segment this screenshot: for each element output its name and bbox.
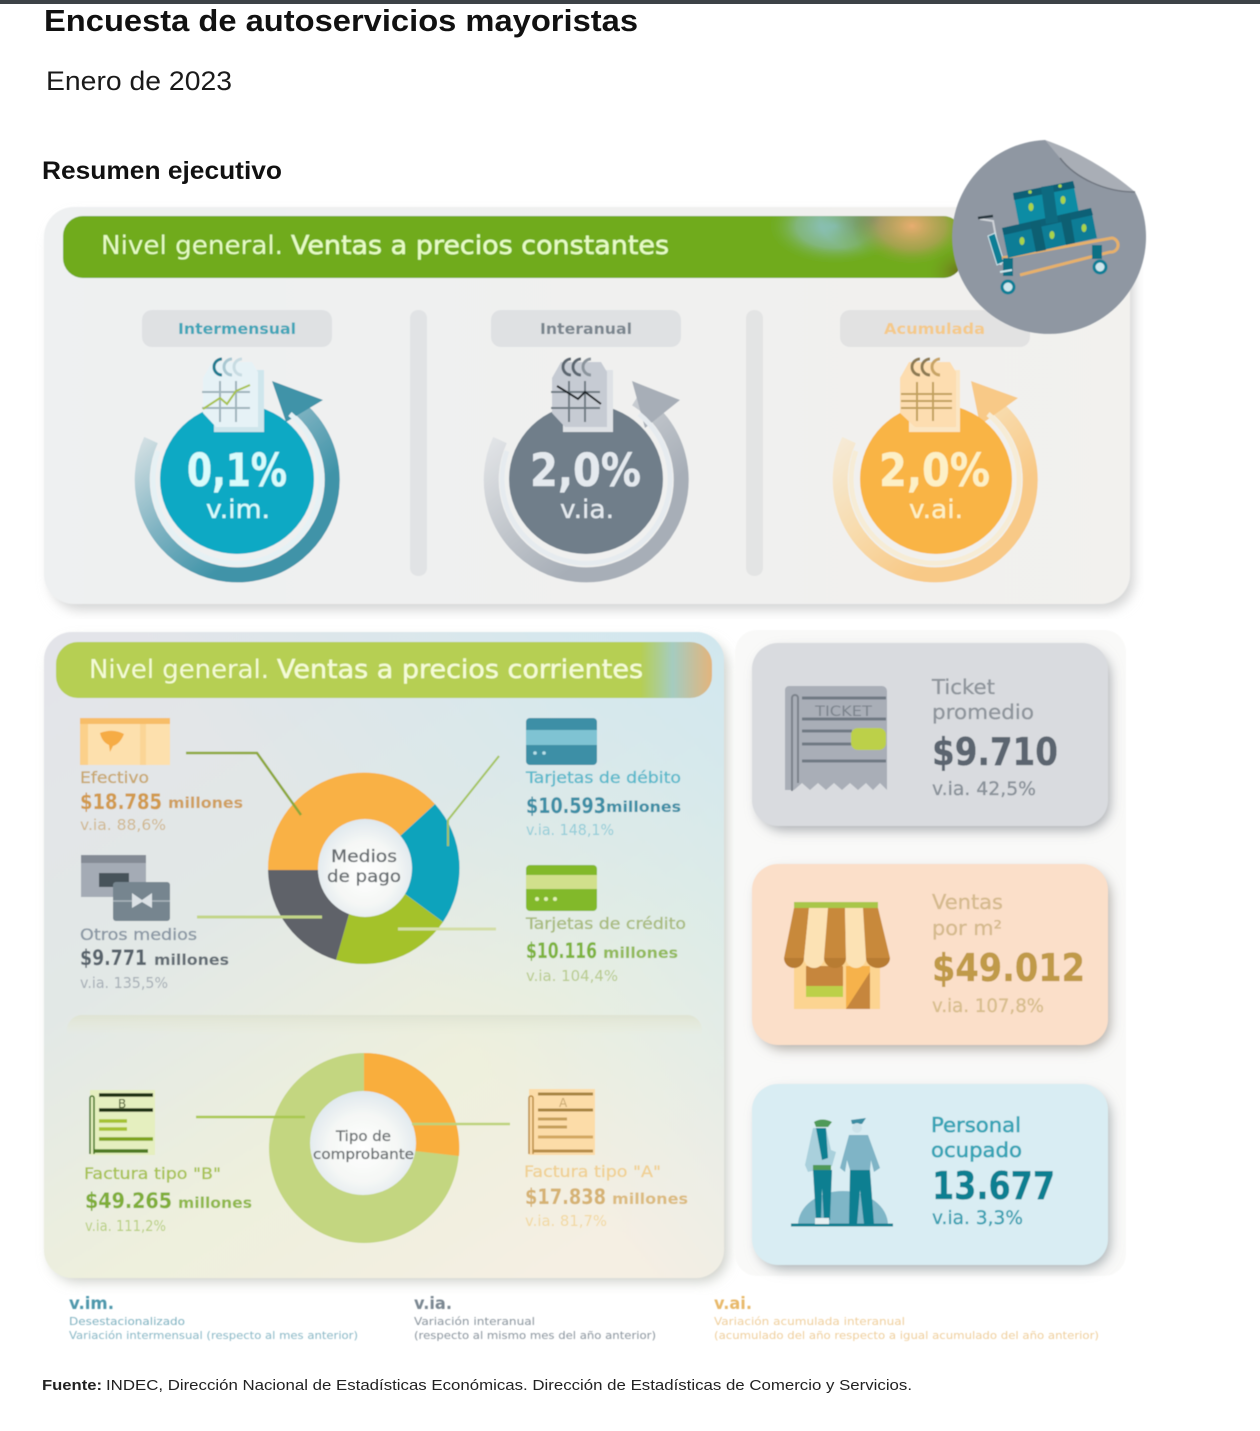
icon: invoice A	[529, 1089, 595, 1155]
source note: Fuente:	[42, 1378, 102, 1394]
metric: factura B: Factura tipo "B"	[84, 1164, 221, 1183]
card text: Ventas	[932, 890, 1003, 914]
disk	[160, 404, 314, 554]
legend: v.ai.: v.ai.	[714, 1294, 752, 1314]
value: 2,0%	[879, 444, 990, 497]
icon: ticket	[785, 686, 887, 791]
card text: promedio	[932, 700, 1034, 724]
metric: debito: Tarjetas de débito	[525, 768, 681, 787]
legend: v.ai.: Variación acumulada interanual	[714, 1315, 905, 1328]
card text: $49.012	[932, 946, 1085, 990]
leader: factura B	[196, 1116, 305, 1118]
icon: cart sticker	[952, 140, 1146, 334]
icon: invoice B	[90, 1090, 155, 1155]
column divider 2	[746, 310, 763, 576]
pill: acumulada: Acumulada	[884, 320, 985, 338]
metric: factura B	[84, 1164, 252, 1235]
panel: constant prices	[44, 184, 1134, 610]
panel: current prices	[44, 632, 728, 1282]
metric: factura A	[524, 1162, 688, 1230]
banner: current prices: Nivel general.	[89, 655, 269, 685]
disk	[509, 404, 663, 554]
metric: debito: millones	[606, 798, 681, 816]
metric: efectivo: v.ia. 88,6%	[80, 816, 166, 834]
legend: v.ai.	[714, 1294, 1099, 1342]
donut label: de pago	[327, 867, 401, 887]
leader: otros	[197, 916, 322, 918]
metric: factura B: $49.265	[85, 1189, 172, 1213]
column divider 1	[410, 310, 427, 576]
card: ventas por m2	[752, 864, 1110, 1049]
source note: INDEC, Dirección Nacional de Estadísticas Económicas. Dirección de Estadísticas de Comercio y Servicios.	[106, 1378, 912, 1394]
metric: factura A: millones	[612, 1190, 688, 1208]
panel: key indicators	[735, 630, 1126, 1276]
metric: credito: v.ia. 104,4%	[526, 967, 618, 985]
card text: v.ia. 42,5%	[932, 778, 1036, 800]
donut: invoice type	[269, 1053, 459, 1243]
metric: credito: Tarjetas de crédito	[525, 914, 686, 933]
pill: interanual	[491, 310, 681, 347]
legend: v.ia.: Variación interanual	[414, 1315, 535, 1328]
card text: 13.677	[932, 1164, 1055, 1208]
metric: otros: Otros medios	[80, 925, 197, 944]
circular arrow	[491, 381, 681, 575]
legend: v.ia.: v.ia.	[414, 1294, 452, 1314]
banner: constant prices	[62, 215, 958, 279]
banner: current prices: Ventas a precios corrientes	[277, 655, 643, 685]
icon: staff	[791, 1118, 893, 1225]
banner: current prices	[56, 642, 712, 698]
metric: efectivo: millones	[168, 794, 243, 812]
icon: invoice A: A	[559, 1096, 568, 1110]
card text	[931, 1113, 1055, 1229]
icon: credit card	[526, 865, 597, 911]
card text	[932, 890, 1085, 1017]
legend: v.im.: Desestacionalizado	[69, 1315, 185, 1328]
unit: v.ai.	[909, 495, 963, 525]
donut label	[327, 847, 401, 887]
metric: factura A: v.ia. 81,7%	[525, 1212, 607, 1230]
card: ticket promedio	[752, 643, 1110, 830]
legend: v.im.	[69, 1294, 358, 1342]
donut label: comprobante	[313, 1147, 414, 1163]
title: Encuesta de autoservicios mayoristas	[44, 3, 638, 38]
legend: v.im.: Variación intermensual (respecto al mes anterior)	[69, 1329, 358, 1342]
pill: intermensual	[142, 310, 332, 347]
value: 0,1%	[187, 444, 287, 497]
band behind lower chart	[67, 1015, 702, 1035]
date subtitle: Enero de 2023	[46, 66, 232, 96]
circular arrow	[142, 381, 332, 575]
donut: payment methods	[268, 773, 460, 964]
circular arrow	[840, 381, 1030, 575]
value: 2,0%	[530, 444, 641, 497]
pill: acumulada	[840, 310, 1030, 347]
icon: spreadsheet	[551, 359, 613, 432]
metric: debito	[525, 768, 681, 839]
metric: otros: v.ia. 135,5%	[80, 974, 168, 992]
card text: v.ia. 3,3%	[932, 1207, 1023, 1229]
metric: credito	[525, 914, 686, 985]
leader: efectivo	[186, 753, 301, 815]
metric: otros	[80, 925, 229, 992]
inner ring	[153, 414, 321, 563]
pill: interanual: Interanual	[540, 320, 632, 338]
leader: credito	[398, 928, 496, 930]
metric: debito: v.ia. 148,1%	[526, 821, 614, 839]
legend: v.ai.: (acumulado del año respecto a igual acumulado del año anterior)	[714, 1329, 1099, 1342]
icon: other payment	[81, 855, 170, 921]
leader: debito	[448, 756, 499, 846]
metric: factura B: v.ia. 111,2%	[85, 1217, 166, 1235]
metric: credito: millones	[603, 944, 678, 962]
inner ring	[851, 414, 1019, 563]
card text: Ticket	[931, 675, 995, 699]
card text	[931, 675, 1058, 800]
card: personal ocupado	[752, 1084, 1110, 1269]
metric: efectivo	[80, 768, 243, 834]
icon: spreadsheet	[900, 359, 960, 432]
legend: v.ia.: (respecto al mismo mes del año anterior)	[414, 1329, 656, 1342]
metric: factura A: $17.838	[525, 1185, 606, 1209]
legend: v.im.: v.im.	[69, 1294, 114, 1314]
inner ring	[502, 414, 670, 563]
card text: v.ia. 107,8%	[932, 995, 1044, 1017]
icon: invoice B: B	[118, 1097, 126, 1111]
icon: store	[784, 902, 890, 1009]
icon: spreadsheet	[202, 359, 264, 432]
banner: constant prices: Ventas a precios constantes	[291, 231, 669, 261]
banner: constant prices: Nivel general.	[101, 231, 283, 261]
section heading: Resumen ejecutivo	[42, 157, 282, 185]
pill: intermensual: Intermensual	[178, 320, 296, 338]
column: interanual	[491, 310, 681, 575]
unit: v.im.	[206, 495, 270, 525]
unit: v.ia.	[560, 495, 614, 525]
metric: efectivo: Efectivo	[80, 768, 149, 787]
disk	[860, 404, 1012, 554]
metric: otros: millones	[154, 951, 229, 969]
metric: otros: $9.771	[80, 946, 147, 970]
card text: ocupado	[931, 1138, 1022, 1162]
icon: ticket: TICKET	[814, 704, 873, 720]
metric: efectivo: $18.785	[80, 790, 162, 814]
donut label: Medios	[331, 847, 397, 867]
metric: debito: $10.593	[526, 794, 606, 818]
legend: v.ia.	[414, 1294, 656, 1342]
metric: credito: $10.116	[526, 939, 597, 963]
card text: por m²	[932, 916, 1002, 940]
donut label	[313, 1129, 414, 1163]
column: intermensual	[142, 310, 332, 575]
card text: Personal	[931, 1113, 1021, 1137]
icon: debit card	[526, 718, 597, 765]
top edge bar	[0, 0, 1260, 4]
donut label: Tipo de	[335, 1129, 391, 1145]
column: acumulada	[840, 310, 1030, 575]
leader: factura A	[412, 1123, 510, 1125]
icon: cash	[80, 718, 170, 765]
metric: factura B: millones	[178, 1194, 252, 1212]
metric: factura A: Factura tipo "A"	[524, 1162, 661, 1181]
card text: $9.710	[932, 730, 1058, 774]
